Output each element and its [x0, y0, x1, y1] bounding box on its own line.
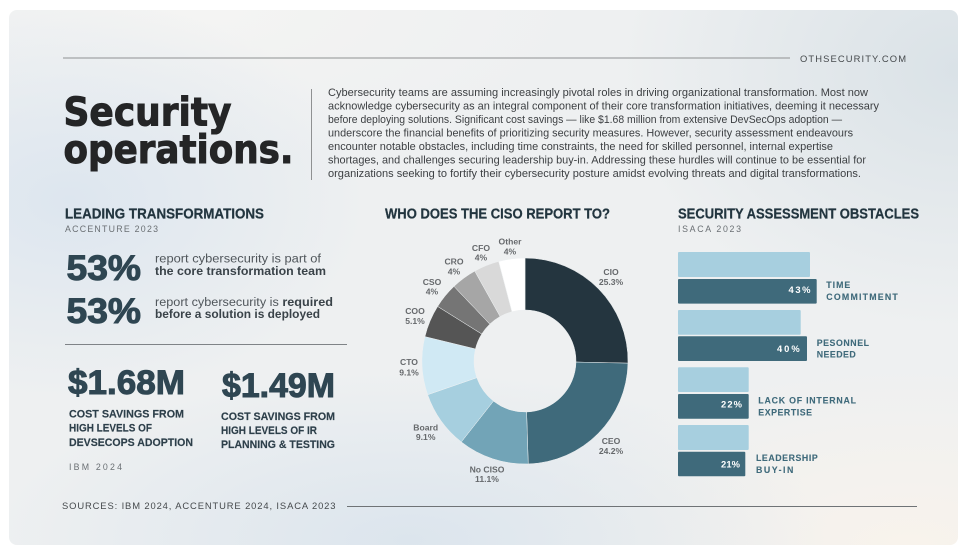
donut labels: 4%	[475, 252, 488, 262]
donut labels: Other	[499, 236, 522, 246]
donut labels: CRO	[444, 256, 464, 266]
stat: IR planning savings: COST SAVINGS FROM	[221, 411, 335, 423]
stat: core transformation team: report cybersecurity is part of	[155, 254, 322, 266]
slice: CRO	[454, 271, 500, 324]
bar group: leadership buy-in: 21%	[721, 458, 741, 469]
stat: core transformation team: 53%	[66, 249, 141, 288]
heading: leading transformations: LEADING TRANSFORMATIONS	[65, 207, 264, 223]
stat: core transformation team: the core transformation team	[155, 266, 326, 278]
intro paragraph: Cybersecurity teams are assuming increasingly pivotal roles in driving organizational transformation. Most now	[328, 87, 868, 99]
title	[64, 90, 294, 173]
donut labels: No CISO	[470, 464, 505, 474]
donut labels: Board	[413, 422, 438, 432]
donut labels: 25.3%	[599, 277, 624, 287]
slice: CSO	[438, 286, 490, 334]
header rule and site name: OTHSECURITY.COM	[800, 53, 906, 64]
donut labels: CTO	[400, 357, 418, 367]
slice: CEO	[527, 362, 628, 464]
bar group: lack of internal expertise: LACK OF INTERNAL	[758, 396, 857, 406]
bar group: personnel needed	[678, 310, 870, 361]
slice: No CISO	[461, 401, 528, 464]
panel: leading transformations	[65, 207, 347, 472]
donut labels	[399, 236, 624, 484]
source: isaca: ISACA 2023	[678, 224, 741, 234]
bar group: time commitment: COMMITMENT	[826, 292, 898, 302]
donut labels: 4%	[504, 246, 517, 256]
intro paragraph: underscore the financial benefits of prioritizing security measures. However, security assessment endeavours	[328, 128, 853, 140]
intro paragraph: before deploying solutions. Significant cost savings — like $1.68 million from extensive DevSecOps adoption —	[328, 114, 842, 126]
donut chart	[422, 258, 628, 464]
intro paragraph: organizations seeking to fortify their cybersecurity posture amidst evolving threats and digital transformations.	[328, 168, 861, 180]
donut labels: 4%	[426, 286, 439, 296]
slice: Board	[428, 378, 493, 442]
stat: required before solution	[66, 292, 333, 331]
stat: devsecops savings: $1.68M	[68, 364, 185, 402]
bar group: lack of internal expertise: 22%	[721, 398, 743, 409]
donut labels: COO	[405, 306, 425, 316]
donut labels: CFO	[472, 243, 490, 253]
stat: devsecops savings: HIGH LEVELS OF	[69, 423, 152, 435]
donut labels: 9.1%	[416, 432, 436, 442]
bar group: time commitment: 43%	[788, 284, 811, 295]
donut labels: 9.1%	[399, 368, 419, 378]
title: operations.	[64, 127, 294, 173]
panel: security assessment obstacles	[678, 207, 919, 476]
intro paragraph: shortages, and challenges securing leadership buy-in. Addressing these hurdles will continue to be essential for	[328, 154, 866, 166]
panel: CISO reporting donut chart	[385, 207, 628, 484]
stat: required before solution: report cybersecurity is required	[155, 297, 333, 309]
intro paragraph: encounter notable obstacles, including time constraints, the need for skilled personnel, internal expertise	[328, 141, 833, 153]
donut labels: 24.2%	[599, 446, 624, 456]
stat: devsecops savings: COST SAVINGS FROM	[69, 409, 184, 421]
stat: devsecops savings	[68, 364, 193, 449]
donut labels: 5.1%	[405, 316, 425, 326]
donut labels: CSO	[423, 277, 442, 287]
slice: CFO	[475, 261, 512, 316]
bar group: personnel needed: PESONNEL	[817, 338, 870, 348]
donut labels: CEO	[602, 436, 621, 446]
bar group: personnel needed: NEEDED	[817, 350, 856, 360]
donut labels: CIO	[603, 267, 619, 277]
title: Security	[64, 90, 232, 136]
intro paragraph	[311, 87, 880, 180]
stat: required before solution: 53%	[66, 292, 141, 331]
slice: CIO	[525, 258, 628, 363]
bar group: leadership buy-in	[678, 425, 818, 476]
bar group: leadership buy-in: LEADERSHIP	[756, 453, 818, 463]
stat: IR planning savings	[221, 367, 335, 451]
bar group: leadership buy-in: BUY-IN	[756, 465, 793, 475]
bar group: personnel needed: 40%	[777, 343, 800, 354]
donut labels: 4%	[448, 266, 461, 276]
heading: who does the CISO report to: WHO DOES THE CISO REPORT TO?	[385, 207, 610, 223]
stat: IR planning savings: PLANNING & TESTING	[221, 439, 335, 451]
slice: CTO	[422, 337, 477, 395]
bar group: lack of internal expertise	[678, 367, 857, 419]
bar group: lack of internal expertise: EXPERTISE	[758, 408, 812, 418]
stat: IR planning savings: HIGH LEVELS OF IR	[221, 425, 317, 437]
stat: IR planning savings: $1.49M	[222, 367, 335, 405]
donut labels: 11.1%	[475, 474, 499, 484]
intro paragraph: acknowledge cybersecurity as an integral component of their core transformation initiatives, deeming it necessary	[328, 100, 880, 112]
stat: devsecops savings: DEVSECOPS ADOPTION	[69, 437, 193, 449]
slice: Other	[499, 258, 525, 312]
bar group: time commitment	[678, 252, 898, 304]
slice: COO	[425, 306, 482, 349]
stat: core transformation team	[66, 249, 326, 288]
bar group: time commitment: TIME	[826, 280, 850, 290]
stat: required before solution: before a solution is deployed	[155, 309, 320, 321]
source: ibm: IBM 2024	[69, 462, 122, 472]
footer sources and rule: SOURCES: IBM 2024, ACCENTURE 2024, ISACA 2023	[62, 500, 336, 511]
source: accenture: ACCENTURE 2023	[65, 224, 158, 234]
heading: security assessment obstacles: SECURITY ASSESSMENT OBSTACLES	[678, 207, 919, 223]
